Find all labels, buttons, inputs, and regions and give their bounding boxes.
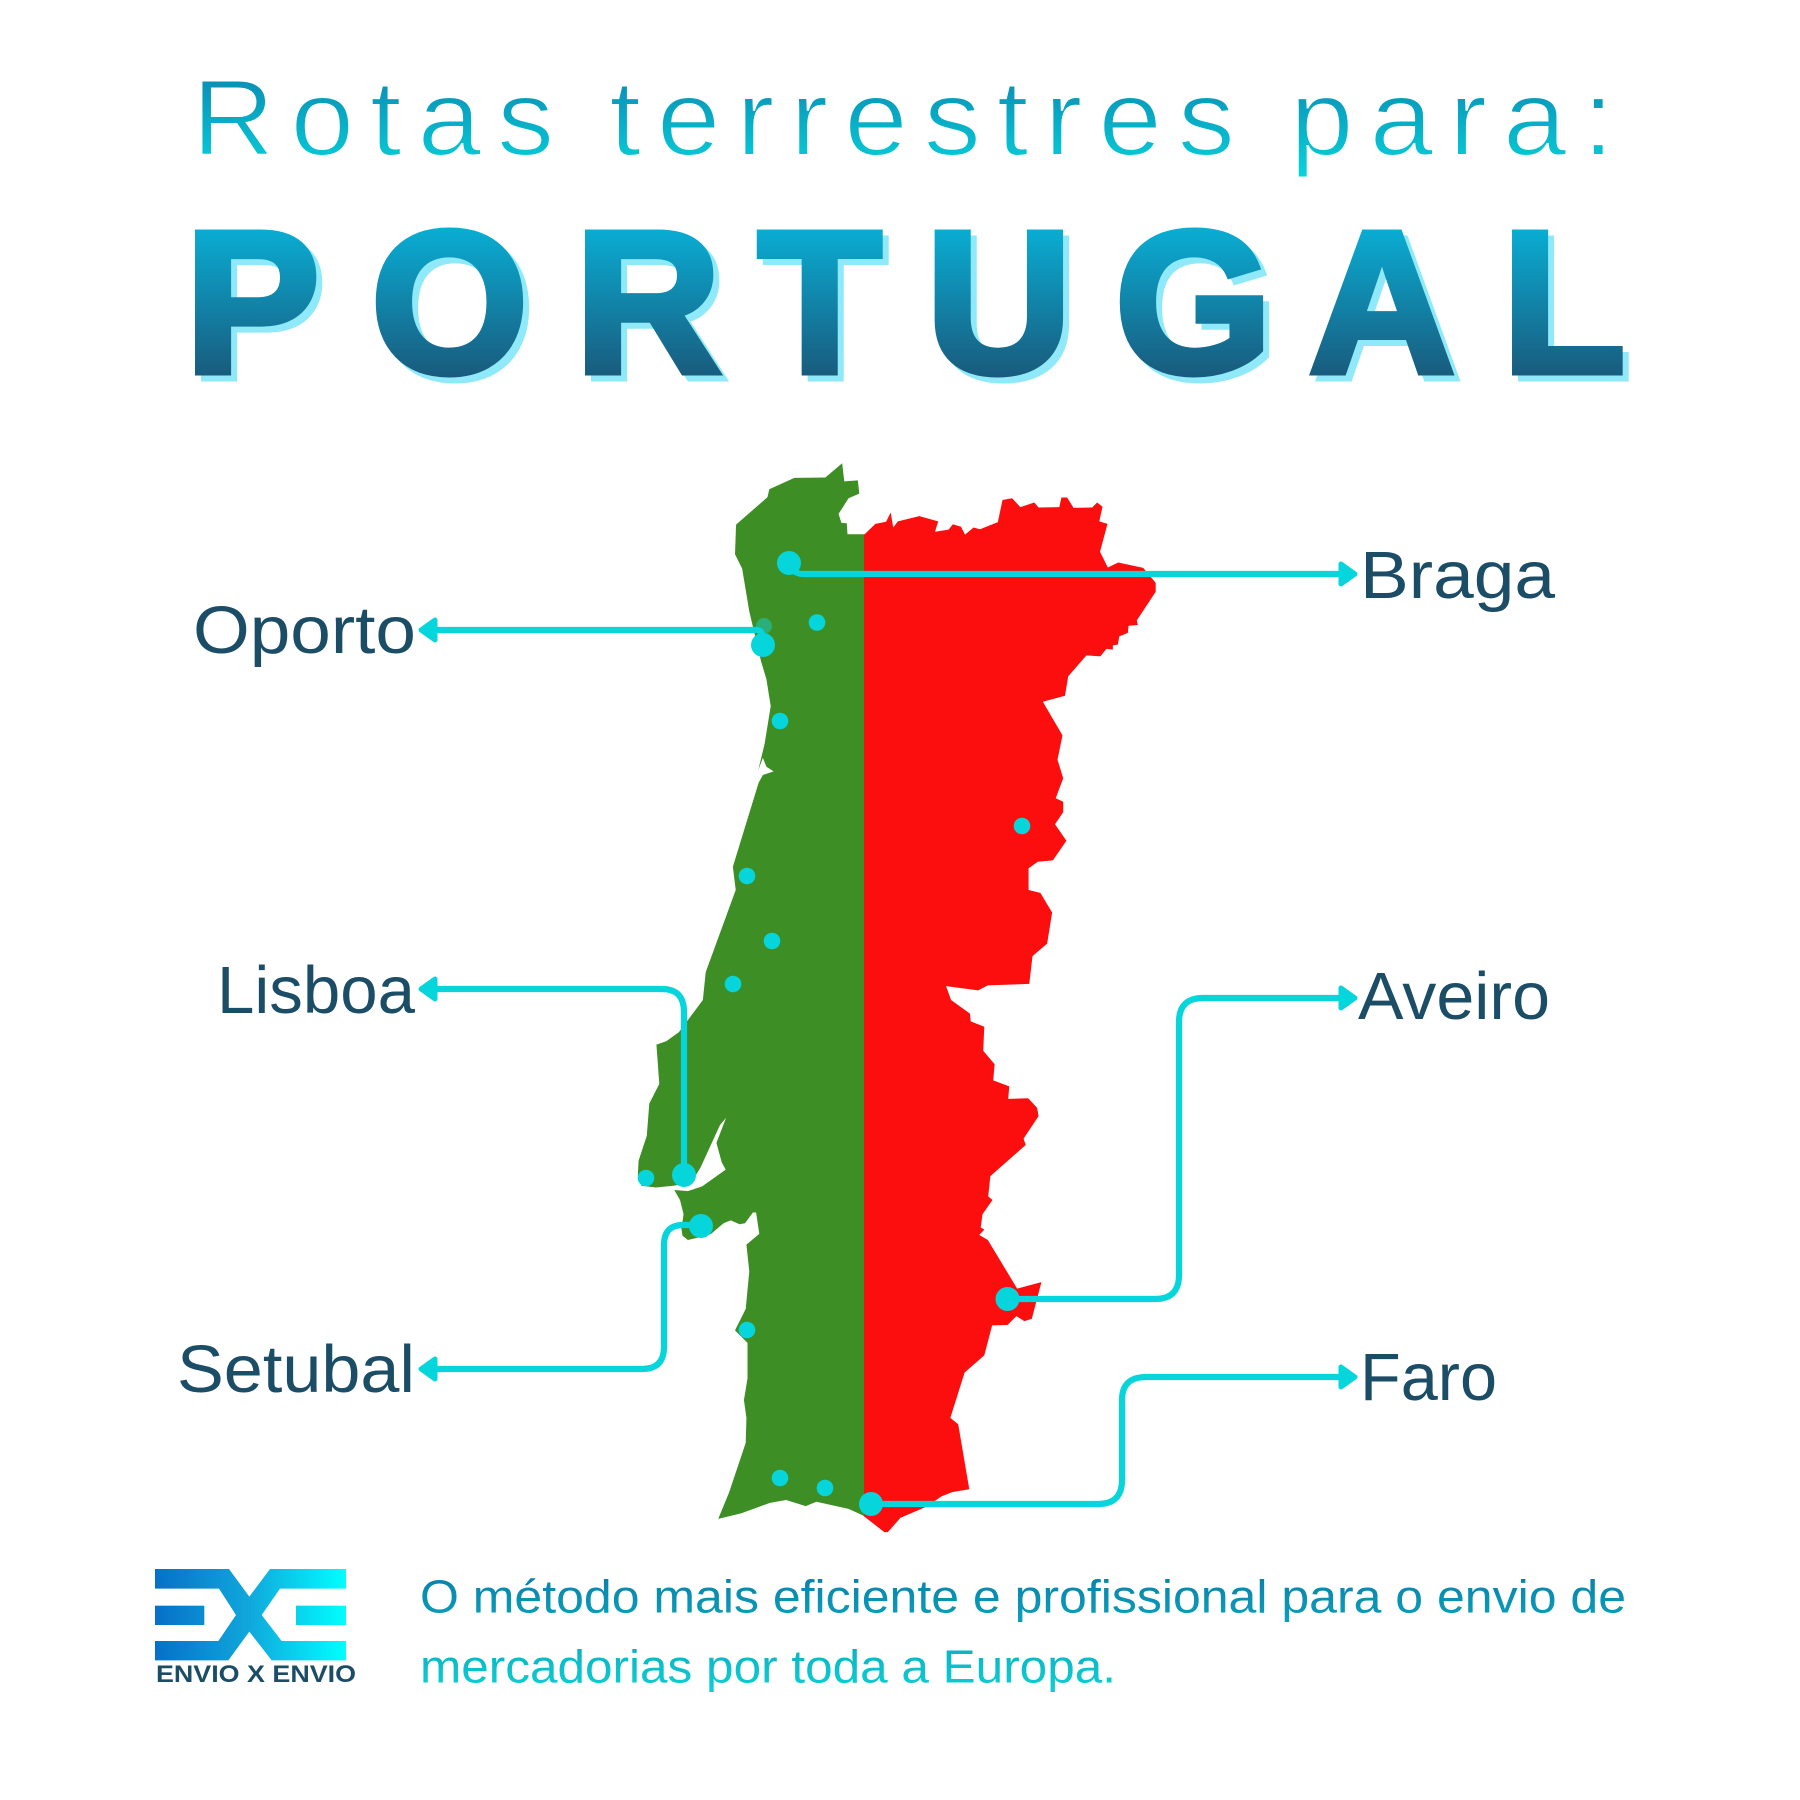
route: Lisboa bbox=[421, 979, 696, 1187]
footer text: O método mais eficiente e profissional para o envio de bbox=[420, 1570, 1626, 1622]
label: Faro: Faro bbox=[1360, 1340, 1497, 1415]
label: Aveiro: Aveiro bbox=[1358, 959, 1550, 1034]
icon: EXE mark bbox=[155, 1569, 346, 1660]
small location dots bbox=[638, 614, 1030, 1496]
route: Oporto bbox=[421, 620, 775, 657]
logo wordmark: ENVIO X ENVIO bbox=[156, 1661, 356, 1688]
footer text: mercadorias por toda a Europa. bbox=[420, 1640, 1116, 1692]
route: Aveiro bbox=[996, 988, 1355, 1311]
route: Setubal bbox=[421, 1214, 713, 1379]
label: Braga: Braga bbox=[1360, 538, 1556, 613]
footer text bbox=[420, 1570, 1626, 1692]
route: Braga bbox=[777, 551, 1355, 584]
logo: Envio X Envio bbox=[155, 1569, 356, 1688]
label: Lisboa: Lisboa bbox=[217, 953, 416, 1028]
route: Faro bbox=[859, 1367, 1355, 1516]
title: Rotas terrestres para: Rotas terrestres para: bbox=[192, 57, 1630, 178]
label: Oporto: Oporto bbox=[193, 593, 416, 668]
heading: PORTUGAL: PORTUGAL bbox=[185, 189, 1625, 415]
label: Setubal: Setubal bbox=[177, 1332, 415, 1407]
map: Portugal in flag colours bbox=[638, 463, 1156, 1532]
